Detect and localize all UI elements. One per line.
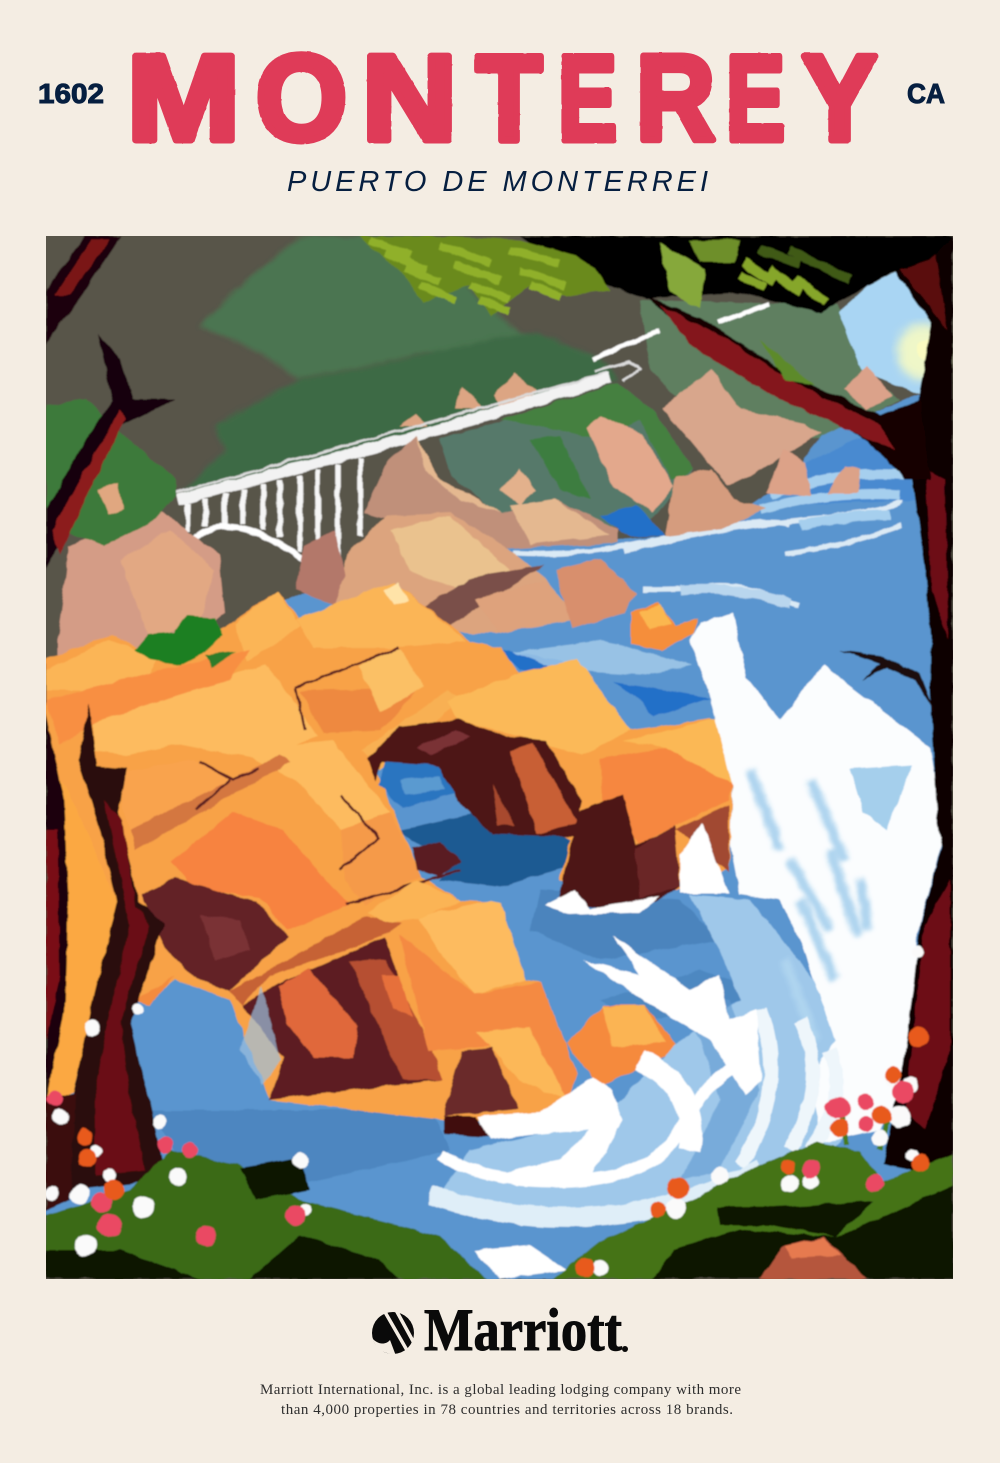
bridge — [176, 304, 769, 592]
title: MONTEREY: N — [362, 30, 457, 166]
Marriott logo — [372, 1297, 628, 1363]
caption text — [260, 1382, 741, 1418]
caption text: than 4,000 properties in 78 countries and territories across 18 brands. — [281, 1402, 733, 1418]
title: MONTEREY: O — [256, 30, 347, 166]
logo wordmark: Marriott — [424, 1297, 622, 1363]
illustration: coastal scene — [30, 220, 970, 1300]
backdrop hillside — [30, 220, 970, 1300]
title: MONTEREY — [127, 30, 877, 166]
title: MONTEREY: E — [558, 30, 617, 166]
green shrub on cliff — [135, 616, 236, 668]
near rocks — [46, 399, 861, 660]
caption text: Marriott International, Inc. is a global leading lodging company with more — [260, 1382, 741, 1398]
year label: 1602 — [38, 78, 104, 109]
sea — [46, 396, 953, 1279]
title: MONTEREY: T — [476, 30, 542, 166]
flowers — [45, 946, 929, 1277]
crashing wave — [430, 613, 945, 1279]
foreground foliage — [46, 1115, 953, 1279]
green hill under bridge — [439, 383, 694, 537]
logo emblem — [372, 1310, 414, 1356]
state label: CA — [907, 78, 945, 109]
orange cliff — [46, 582, 733, 1120]
title: MONTEREY: M — [127, 30, 240, 166]
trees — [46, 236, 953, 1210]
far rocks — [399, 366, 893, 486]
registered mark — [622, 1346, 628, 1352]
title: MONTEREY: Y — [802, 30, 877, 166]
title: MONTEREY: R — [636, 30, 715, 166]
rock arch shadow — [135, 603, 729, 1137]
title: MONTEREY: E — [726, 30, 785, 166]
subtitle: PUERTO DE MONTERREI — [287, 166, 708, 198]
sky and sun — [838, 270, 953, 400]
